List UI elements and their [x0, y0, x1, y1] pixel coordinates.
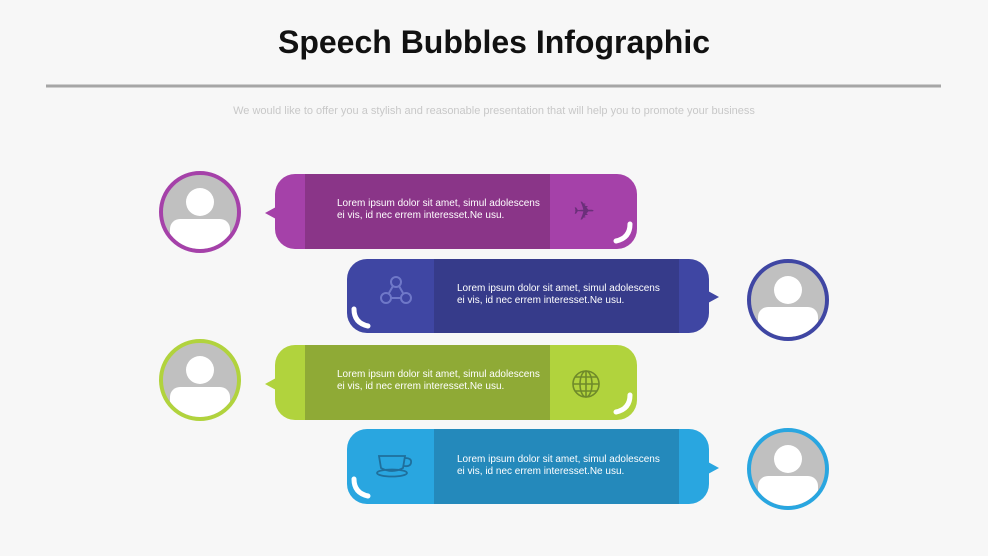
bubble 1: [265, 174, 637, 249]
bubble 2: ei vis, id nec errem interesset.Ne usu.: [457, 295, 624, 306]
bubble 1: ei vis, id nec errem interesset.Ne usu.: [337, 210, 504, 221]
bubble 1: Lorem ipsum dolor sit amet, simul adolescens: [337, 198, 540, 209]
bubble 2: Lorem ipsum dolor sit amet, simul adolescens: [457, 283, 660, 294]
bubble 2: [347, 259, 719, 333]
icon: plane: ✈: [573, 197, 595, 227]
bubble 4: Lorem ipsum dolor sit amet, simul adolescens: [457, 454, 660, 465]
avatar 2: [749, 261, 827, 347]
avatar 4: [749, 430, 827, 516]
bubble 4: ei vis, id nec errem interesset.Ne usu.: [457, 466, 624, 477]
avatar 1: [161, 173, 239, 259]
subtitle: We would like to offer you a stylish and reasonable presentation that will help you to promote your business: [233, 105, 755, 117]
bubble 3: ei vis, id nec errem interesset.Ne usu.: [337, 381, 504, 392]
avatar 3: [161, 341, 239, 427]
bubble 3: Lorem ipsum dolor sit amet, simul adolescens: [337, 369, 540, 380]
icon: globe: [573, 371, 599, 397]
bubble 3: [265, 345, 637, 420]
icon: network: [381, 277, 411, 303]
icon: cup: [377, 456, 411, 476]
title: Speech Bubbles Infographic: [278, 24, 710, 60]
bubble 4: [347, 429, 719, 504]
